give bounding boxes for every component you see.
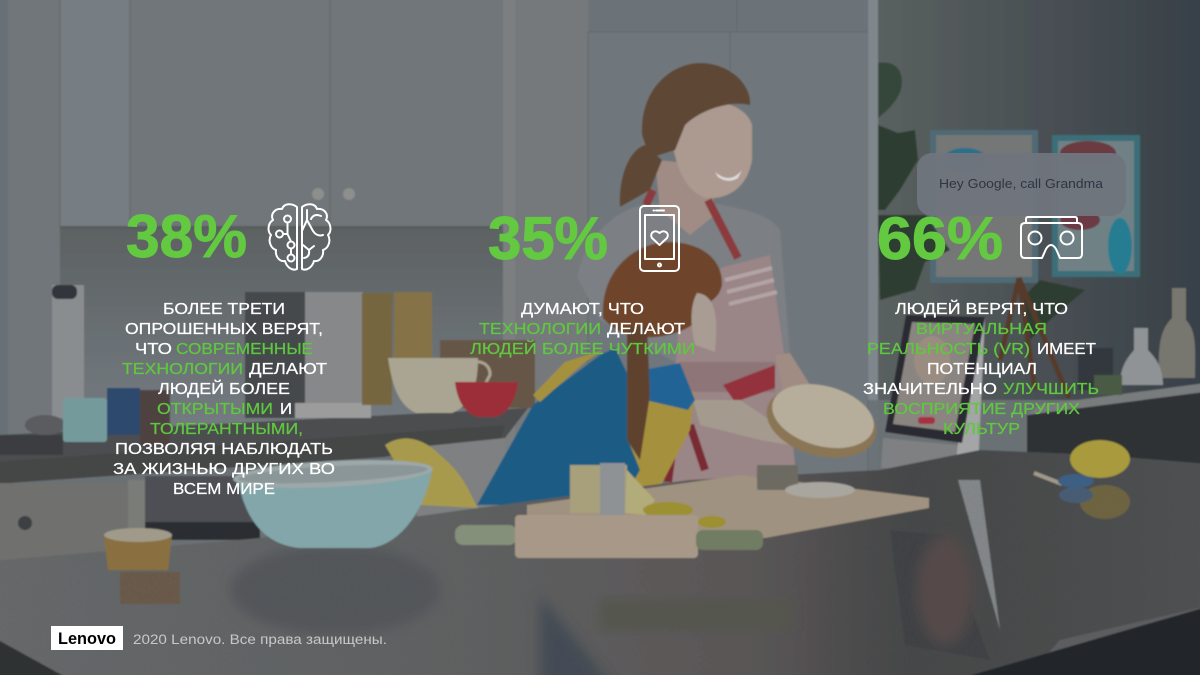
description text: БОЛЕЕ ТРЕТИ — [163, 301, 285, 318]
description text: СОВРЕМЕННЫЕ — [176, 341, 313, 358]
lower cabinets and oven — [0, 483, 128, 563]
speech bubble text: Hey Google, call Grandma — [939, 176, 1104, 191]
wall behind right side — [875, 0, 1200, 400]
icon: phone with heart — [640, 206, 679, 271]
description text: И — [280, 401, 292, 418]
description text: ИМЕЕТ — [1037, 341, 1096, 358]
butter and grater — [570, 463, 726, 528]
plant — [878, 62, 1085, 340]
description text: ДЕЛАЮТ — [607, 321, 685, 338]
woman — [577, 63, 810, 485]
counter items — [25, 285, 535, 445]
description text — [863, 299, 1099, 438]
footer — [51, 626, 387, 650]
description text: ЗНАЧИТЕЛЬНО — [863, 381, 997, 398]
description text: ПОЗВОЛЯЯ НАБЛЮДАТЬ — [115, 441, 333, 458]
upper cabinets — [60, 0, 503, 229]
ramekin — [104, 528, 172, 570]
description text: ОТКРЫТЫМИ — [157, 401, 273, 418]
description text: ВИРТУАЛЬНАЯ — [916, 321, 1047, 338]
icon: VR headset — [1021, 217, 1082, 258]
description text: ЛЮДЕЙ ВЕРЯТ, ЧТО — [895, 299, 1068, 318]
description text: ДУМАЮТ, ЧТО — [521, 301, 644, 318]
vases — [1078, 288, 1195, 395]
left wall — [0, 0, 60, 440]
description text: ОПРОШЕННЫХ ВЕРЯТ, — [125, 321, 323, 338]
description text: ПОТЕНЦИАЛ — [927, 361, 1037, 378]
description text: ТОЛЕРАНТНЫМИ, — [150, 421, 303, 438]
rolling pin — [455, 515, 763, 558]
description text: ДЕЛАЮТ — [249, 361, 327, 378]
tripod lamp — [1000, 278, 1069, 398]
girl — [385, 242, 790, 508]
backsplash — [60, 228, 590, 428]
stat number 66%: 66% — [877, 205, 1003, 272]
description text: ВОСПРИЯТИЕ ДРУГИХ — [883, 401, 1080, 418]
metal cup — [757, 465, 798, 490]
cutting board — [527, 475, 929, 538]
Lenovo logo — [51, 626, 123, 650]
stat number 35%: 35% — [488, 205, 608, 272]
description text: ЧТО — [135, 341, 172, 358]
description text — [470, 301, 695, 358]
speech bubble — [917, 153, 1126, 216]
flour — [785, 482, 855, 498]
description text: ЗА ЖИЗНЬЮ ДРУГИХ ВО — [113, 461, 335, 478]
column 3: 66% stat — [863, 205, 1099, 438]
description text: ВСЕМ МИРЕ — [173, 481, 275, 498]
icon: brain — [269, 204, 330, 270]
dough — [759, 373, 885, 469]
description text: РЕАЛЬНОСТЬ (VR) — [867, 341, 1030, 358]
description text — [113, 301, 335, 498]
lemon and spoon — [1034, 440, 1130, 488]
copyright: 2020 Lenovo. Все права защищены. — [133, 632, 387, 647]
description text: ЛЮДЕЙ БОЛЕЕ — [158, 379, 290, 398]
stat number 38%: 38% — [126, 203, 247, 270]
central pillar and tall cabinet — [503, 0, 588, 480]
column 2: 35% stat — [470, 205, 695, 358]
back counter — [0, 408, 528, 485]
smart display — [881, 315, 985, 477]
island countertop — [0, 450, 1200, 675]
right counter and cabinet — [1027, 390, 1200, 470]
description text: УЛУЧШИТЬ — [1003, 381, 1099, 398]
column 1: 38% stat — [113, 203, 335, 498]
Lenovo logo: Lenovo — [58, 629, 116, 648]
description text: ТЕХНОЛОГИИ — [122, 361, 243, 378]
big bowl — [232, 456, 434, 548]
description text: ТЕХНОЛОГИИ — [479, 321, 601, 338]
pictures on wall — [930, 130, 1140, 283]
description text: ЛЮДЕЙ БОЛЕЕ ЧУТКИМИ — [470, 339, 695, 358]
description text: КУЛЬТУР — [943, 421, 1020, 438]
